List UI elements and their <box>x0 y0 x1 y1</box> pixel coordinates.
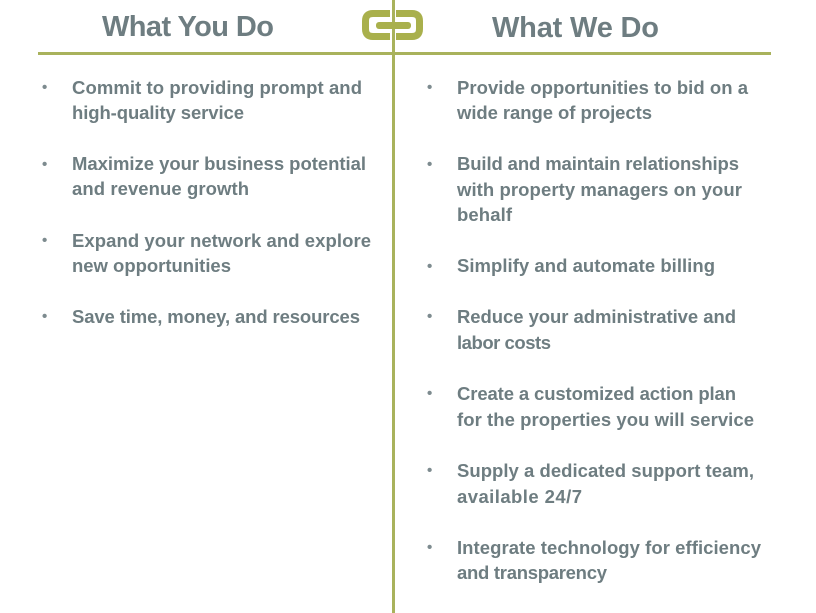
list item: business potential: • <box>42 156 47 173</box>
vertical divider <box>392 0 395 613</box>
heading: What You Do: What You Do <box>102 11 274 43</box>
list item: prompt service: high-quality service <box>72 102 244 123</box>
list item: prompt service: Commit to providing prompt and <box>72 77 362 98</box>
list item: relationships: with property managers on your <box>456 179 742 200</box>
icon: chain link <box>366 14 420 36</box>
list item: expand network: • <box>42 232 47 249</box>
list item: relationships: Build and maintain relationships <box>457 153 739 174</box>
list item: bid opportunities: wide range of projects <box>456 102 652 123</box>
list item: relationships: • <box>427 156 432 173</box>
list item: action plan: Create a customized action plan <box>457 383 736 404</box>
list item: action plan <box>427 383 754 430</box>
list item: save time: • <box>42 308 47 325</box>
list item: relationships: behalf <box>457 204 513 225</box>
list item: support team: • <box>427 462 432 479</box>
list item: bid opportunities <box>427 77 749 123</box>
list item: expand network: Expand your network and explore <box>72 230 371 251</box>
list item: technology: • <box>427 539 432 556</box>
list item: prompt service: • <box>42 79 47 96</box>
list item: relationships <box>427 153 742 225</box>
list item: support team: Supply a dedicated support team, <box>457 460 754 481</box>
list item: business potential <box>42 153 366 199</box>
list item: reduce costs <box>427 306 736 353</box>
list item: action plan: • <box>427 385 432 402</box>
list item: bid opportunities: Provide opportunities to bid on a <box>457 77 749 98</box>
list item: reduce costs: Reduce your administrative and <box>457 306 736 327</box>
heading: What We Do: What We Do <box>492 12 659 44</box>
panel: what we do list <box>427 77 762 583</box>
list item: action plan: for the properties you will service <box>457 409 754 430</box>
list item: business potential: Maximize your business potential <box>72 153 366 174</box>
horizontal rule <box>38 52 771 55</box>
list item: billing: Simplify and automate billing <box>457 255 715 276</box>
list item: technology: Integrate technology for efficiency <box>457 537 762 558</box>
list item: billing: • <box>427 258 432 275</box>
list item: bid opportunities: • <box>427 79 432 96</box>
list item: business potential: and revenue growth <box>72 178 249 199</box>
panel: what you do list <box>42 77 371 327</box>
list item: technology <box>427 537 762 583</box>
list item: prompt service <box>42 77 362 123</box>
list item: reduce costs: • <box>427 308 432 325</box>
list item: save time: Save time, money, and resources <box>72 306 360 327</box>
list item: reduce costs: labor costs <box>457 332 551 353</box>
list item: support team: available 24/7 <box>457 486 582 507</box>
list item: expand network <box>42 230 371 276</box>
list item: support team <box>427 460 754 507</box>
list item: expand network: new opportunities <box>72 255 231 276</box>
list item: technology: and transparency <box>457 562 608 583</box>
